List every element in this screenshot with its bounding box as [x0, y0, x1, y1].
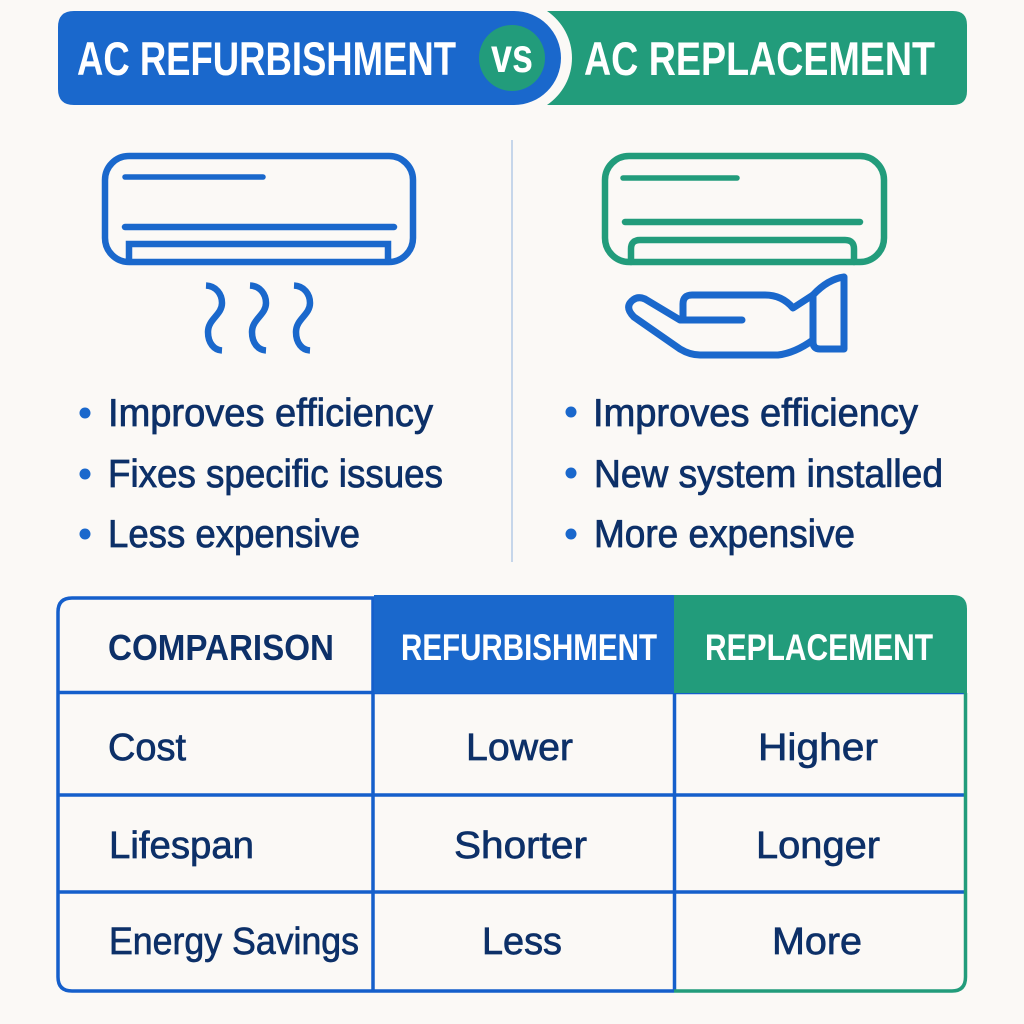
- comparison table: [58, 595, 967, 991]
- table header: comparison: COMPARISON: [108, 627, 334, 668]
- bullet list: replacement benefits: More expensive: [594, 513, 855, 556]
- panel: replacement: [566, 156, 943, 556]
- icon: open hand: [629, 277, 844, 355]
- bullet list: refurbishment benefits: Less expensive: [108, 513, 360, 556]
- title: AC replacement side: [547, 11, 967, 105]
- title: AC refurbishment side: [58, 11, 561, 105]
- row: cost: Cost: [108, 727, 186, 769]
- row: cost: Lower: [466, 727, 573, 769]
- bullet list: refurbishment benefits: Fixes specific issues: [108, 453, 443, 496]
- row: energy savings: Energy Savings: [109, 921, 359, 963]
- row: energy savings: More: [772, 921, 862, 963]
- bullet list: replacement benefits: Improves efficiency: [593, 392, 918, 435]
- title banner: [58, 11, 967, 105]
- row: lifespan: Longer: [756, 825, 880, 867]
- table header: replacement: [674, 595, 967, 693]
- row: lifespan: [109, 825, 880, 867]
- table grid: [58, 598, 966, 991]
- icon: new air conditioner: [605, 156, 884, 262]
- bullet list: refurbishment benefits: [80, 392, 443, 556]
- bullet list: replacement benefits: [566, 392, 943, 556]
- icon: air conditioner with airflow: [105, 156, 413, 350]
- table header: refurbishment: REFURBISHMENT: [401, 627, 657, 668]
- row: energy savings: [109, 921, 862, 963]
- table header: replacement: REPLACEMENT: [705, 627, 933, 668]
- row: energy savings: Less: [482, 921, 562, 963]
- vs badge: [479, 25, 545, 91]
- vs badge: vs: [491, 30, 533, 83]
- bullet list: refurbishment benefits: Improves efficiency: [108, 392, 433, 435]
- row: lifespan: Lifespan: [109, 825, 254, 867]
- panel: refurbishment: [80, 156, 443, 556]
- table header: refurbishment: [374, 595, 674, 693]
- row: cost: Higher: [758, 727, 878, 769]
- title: AC replacement side: AC REPLACEMENT: [584, 32, 935, 85]
- bullet list: replacement benefits: New system installed: [594, 453, 943, 496]
- title: AC refurbishment side: AC REFURBISHMENT: [77, 32, 456, 85]
- row: cost: [108, 727, 878, 769]
- row: lifespan: Shorter: [454, 825, 587, 867]
